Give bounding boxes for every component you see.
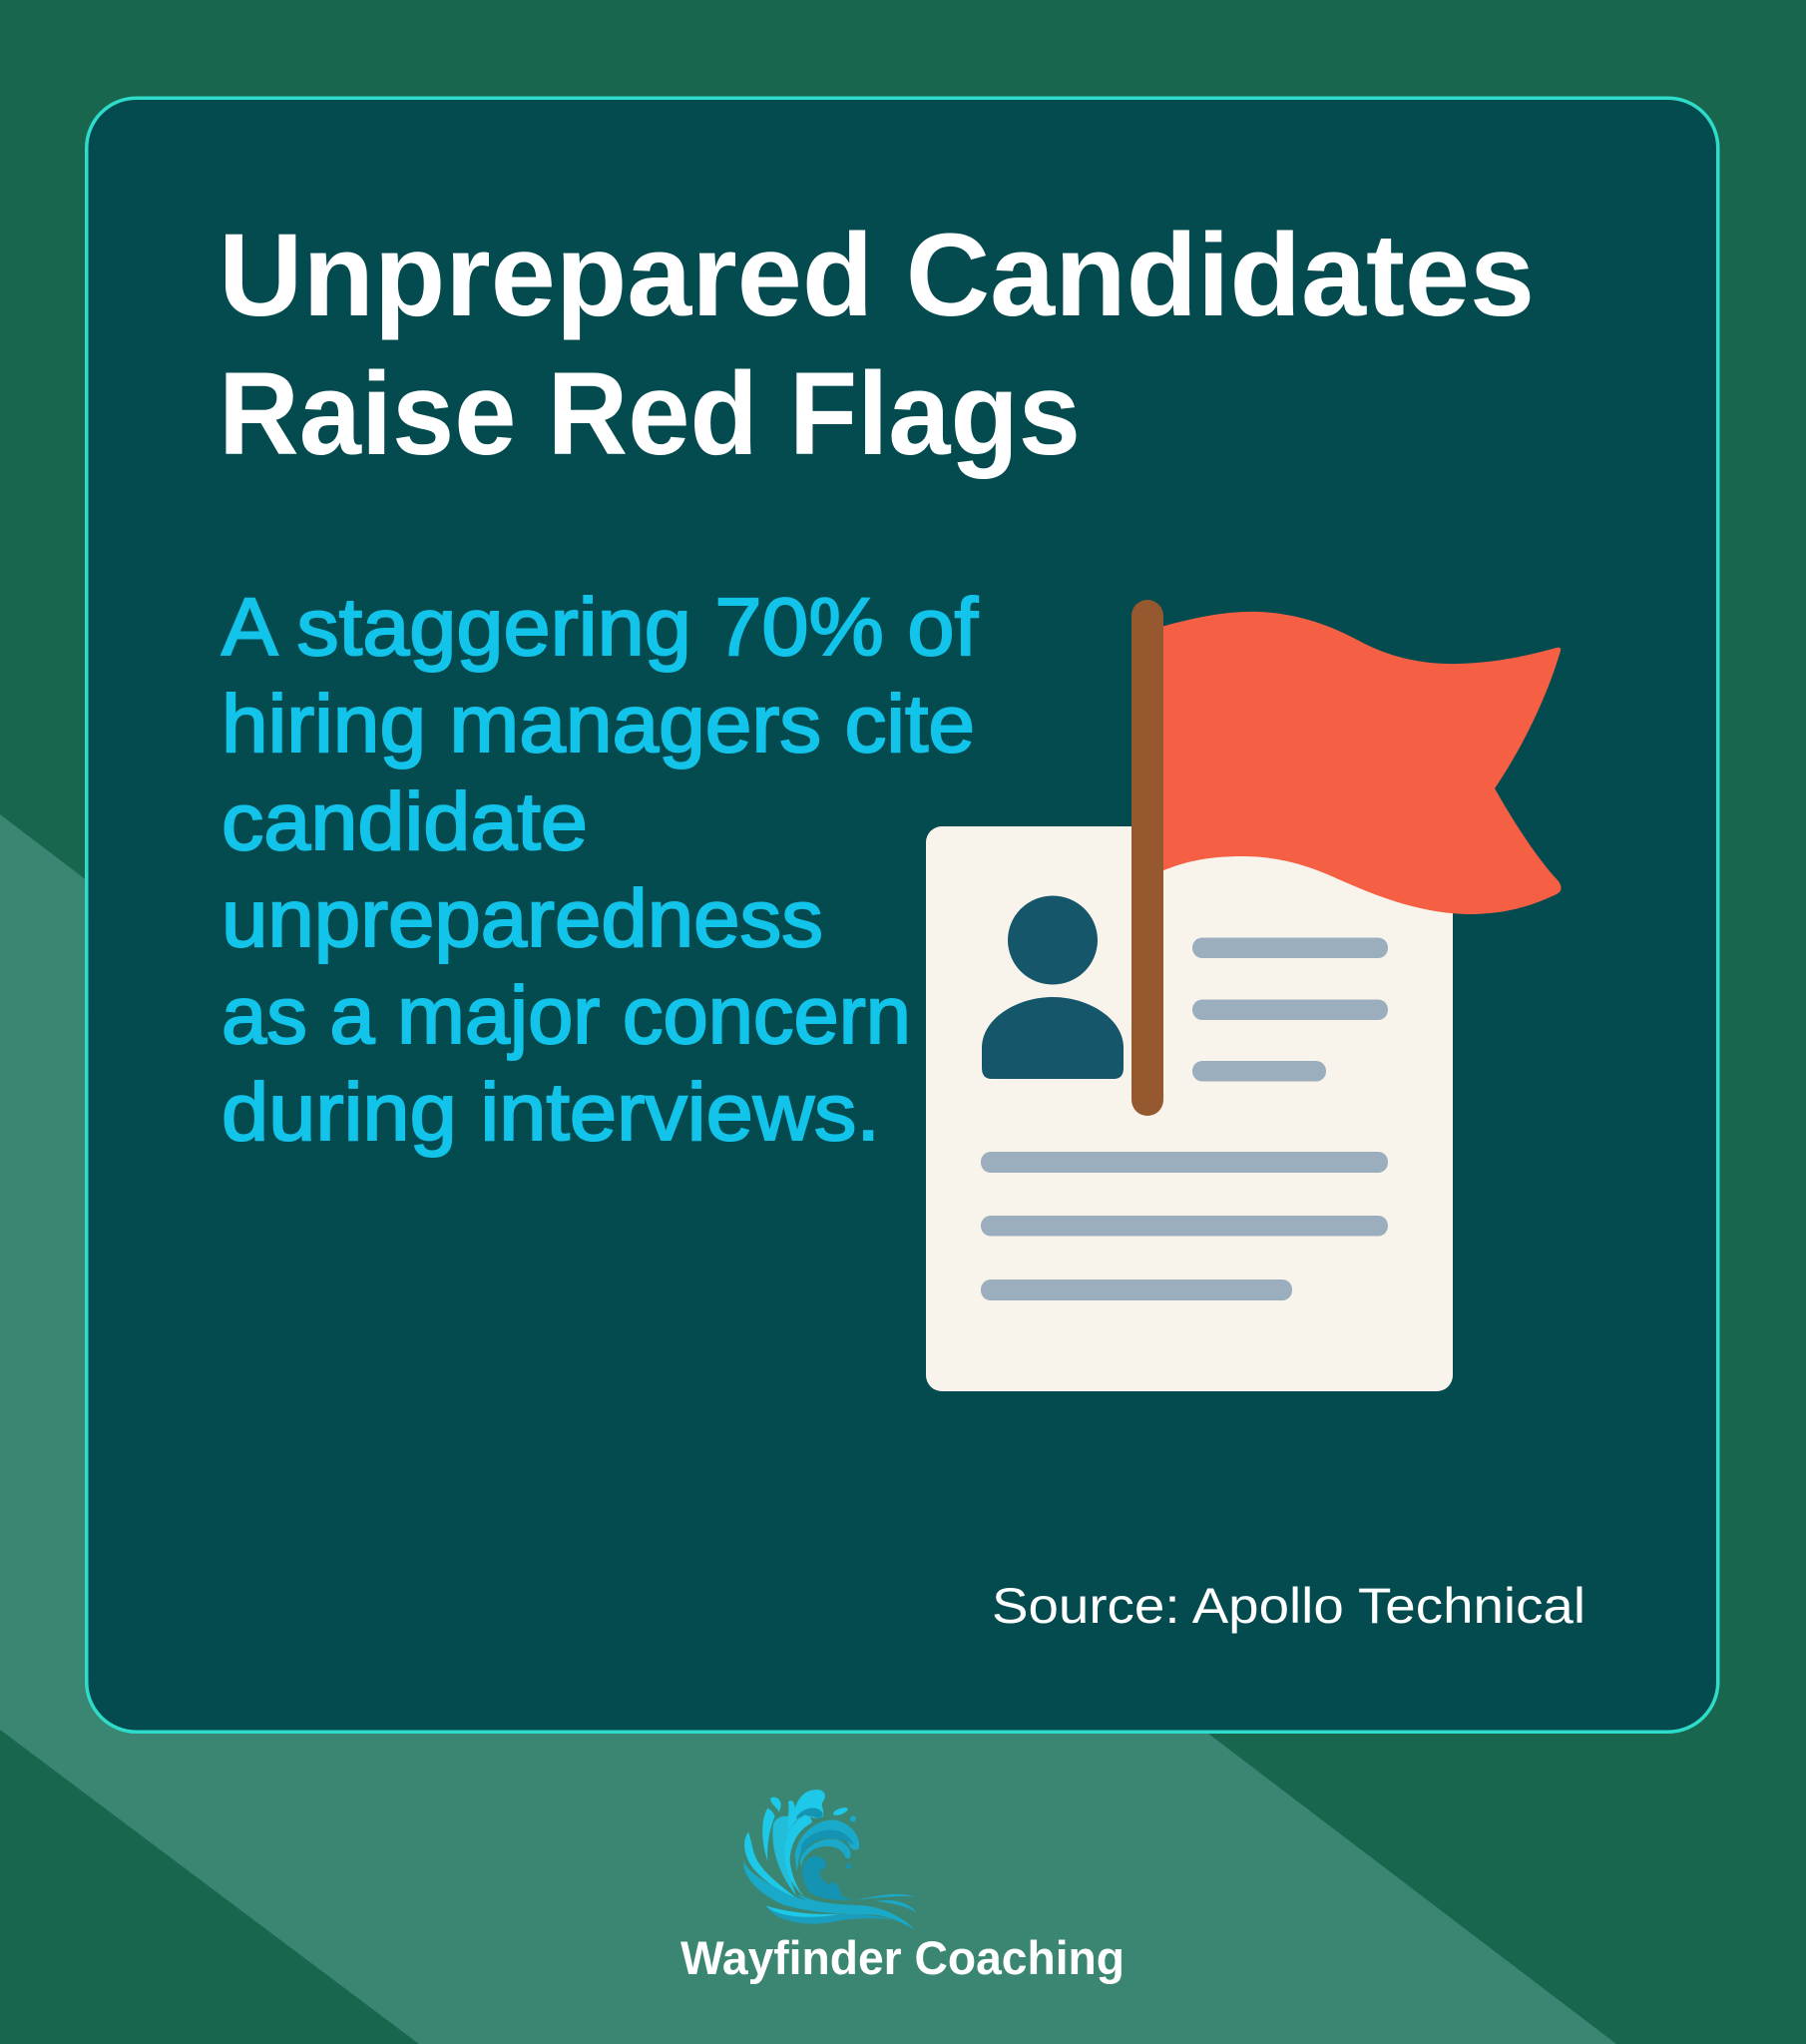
illustration: resume with red flag — [926, 600, 1562, 1391]
body text: unpreparedness — [222, 873, 823, 964]
logo: Wayfinder Coaching — [680, 1789, 1125, 1984]
icon: wave — [743, 1789, 917, 1929]
body text: hiring managers cite — [222, 679, 975, 769]
title — [219, 210, 1535, 480]
resume text lines — [981, 938, 1388, 1300]
title: Raise Red Flags — [219, 348, 1081, 480]
body text — [222, 582, 978, 1158]
body text: candidate — [222, 776, 588, 867]
title: Unprepared Candidates — [219, 210, 1535, 341]
body text: during interviews. — [222, 1067, 880, 1158]
panel: main card — [87, 98, 1718, 1732]
body text: A staggering 70% of — [222, 582, 978, 673]
resume paper — [926, 826, 1453, 1391]
icon: red flag — [1161, 612, 1562, 914]
source citation: Source: Apollo Technical — [992, 1578, 1585, 1634]
logo wordmark: Wayfinder Coaching — [680, 1931, 1125, 1984]
icon: flag pole — [1131, 600, 1163, 1116]
icon: person avatar — [982, 896, 1124, 1079]
body text: as a major concern — [222, 970, 911, 1061]
